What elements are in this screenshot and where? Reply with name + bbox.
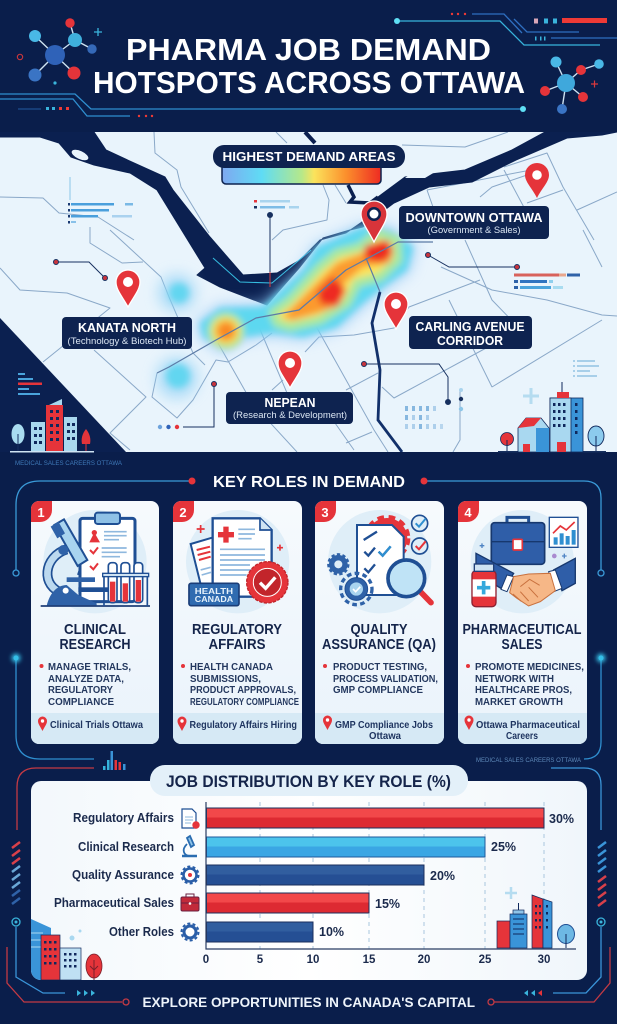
card bullets: GMP COMPLIANCE	[333, 684, 423, 696]
axes	[206, 802, 576, 949]
card bullets: PROCESS VALIDATION,	[333, 673, 438, 685]
card bullets: REGULATORY COMPLIANCE	[190, 696, 299, 708]
label: Kanata North	[62, 317, 192, 349]
axis tick labels: 15	[363, 954, 376, 966]
card heading: RESEARCH	[60, 636, 130, 653]
icon: briefcase row	[181, 894, 199, 911]
icon: document row	[182, 809, 200, 829]
card bullets	[40, 661, 131, 708]
card heading: REGULATORY	[192, 621, 282, 638]
value labels: 30%	[549, 812, 574, 826]
card bullets	[181, 661, 299, 708]
label: Kanata North: (Technology & Biotech Hub)	[68, 336, 186, 347]
card heading: CLINICAL	[64, 621, 126, 638]
card bullets: HEALTH CANADA	[190, 661, 273, 673]
card link: Ottawa Pharmaceutical	[476, 719, 580, 731]
axis tick labels: 25	[479, 954, 492, 966]
title: PHARMA JOB DEMAND	[126, 32, 491, 67]
panel: card 2 regulatory affairs: 2	[179, 505, 187, 520]
card heading	[192, 621, 282, 653]
card bullets: ANALYZE DATA,	[48, 673, 124, 685]
label: Downtown Ottawa: DOWNTOWN OTTAWA	[406, 211, 542, 225]
section frame: key roles	[12, 478, 606, 759]
card bullets: PRODUCT APPROVALS,	[190, 684, 296, 696]
card bullets	[323, 661, 438, 696]
axis tick labels: 20	[418, 954, 430, 966]
label: Kanata North: KANATA NORTH	[78, 320, 176, 335]
chart title: JOB DISTRIBUTION BY KEY ROLE (%)	[166, 772, 451, 791]
panel: job distribution chart	[31, 765, 587, 980]
axis tick labels	[203, 954, 550, 966]
card heading: AFFAIRS	[208, 636, 266, 653]
main road over heat	[157, 242, 433, 373]
axis tick labels: 0	[203, 954, 209, 966]
dark highway	[372, 292, 402, 452]
callout lines and mini legends	[54, 212, 520, 427]
value labels: 25%	[491, 840, 516, 854]
icon: briefcase handshake medicine	[471, 510, 578, 613]
axis tick labels: 10	[307, 954, 319, 966]
pin: northeast	[525, 163, 549, 198]
card bullets: REGULATORY	[48, 684, 113, 696]
footer call to action: EXPLORE OPPORTUNITIES IN CANADA'S CAPITAL	[142, 994, 475, 1010]
category labels: Quality Assurance	[72, 868, 174, 882]
card heading: SALES	[502, 636, 542, 653]
icon: microscope row	[182, 836, 197, 856]
label: Carling Avenue Corridor: CORRIDOR	[437, 333, 504, 348]
icon: microscope clipboard and test tubes	[41, 510, 150, 613]
label: Downtown Ottawa: (Government & Sales)	[428, 225, 520, 236]
card bullets	[466, 661, 584, 708]
icon: small bar motif	[103, 751, 126, 770]
card bullets: SUBMISSIONS,	[190, 673, 261, 685]
icon: gear row 2	[182, 924, 198, 940]
card bullets: COMPLIANCE	[48, 696, 114, 708]
legend: highest demand areas: HIGHEST DEMAND AREAS	[222, 149, 396, 164]
card link: Careers	[506, 730, 538, 742]
card link	[178, 716, 297, 731]
panel: card 4 pharmaceutical sales	[458, 501, 587, 744]
value labels	[319, 812, 574, 939]
bottom-right corner city	[498, 382, 606, 452]
label: Carling Avenue Corridor	[409, 316, 532, 349]
card link: Clinical Trials Ottawa	[50, 719, 143, 731]
axis tick labels: 5	[257, 954, 264, 966]
icon: checklist gears magnifier	[328, 510, 431, 613]
corner triangle	[0, 318, 126, 452]
icon: regulatory documents and seal: HEALTH	[195, 586, 233, 596]
icon: molecule left	[17, 18, 102, 85]
pin: Kanata North	[116, 270, 140, 307]
axis tick labels: 30	[538, 954, 550, 966]
card link: Ottawa	[369, 730, 401, 742]
bottom-left corner city	[10, 373, 94, 452]
icon: regulatory documents and seal	[186, 510, 289, 613]
label: Nepean: (Research & Development)	[233, 410, 347, 421]
pin: Downtown	[361, 201, 387, 242]
category labels	[54, 811, 174, 939]
icon: gear row	[182, 866, 198, 884]
pin: Carling	[384, 292, 408, 329]
gridlines	[260, 802, 544, 949]
legend: highest demand areas	[213, 145, 405, 184]
card heading: ASSURANCE (QA)	[322, 636, 436, 653]
card heading	[322, 621, 436, 653]
chart right skyline	[497, 887, 574, 948]
chart frame decoration	[7, 768, 610, 1005]
panel: card 2 regulatory affairs	[173, 501, 302, 744]
chart left skyline	[31, 919, 102, 980]
card heading	[462, 621, 582, 653]
panel: card 4 pharmaceutical sales: 4	[464, 505, 472, 520]
panel: heat map of Ottawa	[0, 132, 617, 452]
value labels: 20%	[430, 869, 455, 883]
value labels: 10%	[319, 925, 344, 939]
card bullets: NETWORK WITH	[475, 673, 554, 685]
label: Downtown Ottawa	[399, 206, 549, 239]
icon: regulatory documents and seal: CANADA	[195, 594, 234, 604]
card link: Regulatory Affairs Hiring	[190, 719, 297, 731]
watermark right: MEDICAL SALES CAREERS OTTAWA	[476, 757, 582, 764]
card heading: PHARMACEUTICAL	[462, 621, 582, 638]
category labels: Pharmaceutical Sales	[54, 896, 174, 910]
panel: card 1 clinical research: 1	[37, 505, 45, 520]
river islands and tributaries	[70, 132, 435, 283]
card link	[323, 716, 433, 742]
panel: card 3 quality assurance: 3	[321, 505, 329, 520]
heat layers	[156, 227, 413, 399]
card bullets: PRODUCT TESTING,	[333, 661, 427, 673]
panel: card 1 clinical research	[31, 501, 159, 744]
heading: key roles in demand: KEY ROLES IN DEMAND	[213, 474, 405, 491]
label: Carling Avenue Corridor: CARLING AVENUE	[416, 319, 525, 334]
card bullets: MANAGE TRIALS,	[48, 661, 131, 673]
card link	[38, 716, 143, 731]
card heading	[60, 621, 130, 653]
header: circuit decoration	[0, 13, 617, 117]
bars	[206, 808, 544, 942]
category labels: Other Roles	[109, 925, 174, 939]
panel: card 3 quality assurance	[315, 501, 444, 744]
river	[0, 132, 617, 305]
chart title	[150, 765, 468, 796]
title	[93, 32, 525, 100]
category labels: Clinical Research	[78, 840, 174, 854]
map roads	[0, 132, 617, 452]
card bullets: MARKET GROWTH	[475, 696, 563, 708]
card bullets: HEALTHCARE PROS,	[475, 684, 572, 696]
value labels: 15%	[375, 897, 400, 911]
card link: GMP Compliance Jobs	[335, 719, 433, 731]
card bullets: PROMOTE MEDICINES,	[475, 661, 584, 673]
category labels: Regulatory Affairs	[73, 811, 174, 825]
card heading: QUALITY	[350, 621, 408, 638]
icon: molecule right	[540, 56, 604, 114]
label: Nepean	[226, 392, 353, 424]
label: Nepean: NEPEAN	[264, 395, 316, 410]
pin: Nepean	[278, 351, 302, 388]
card link	[464, 716, 580, 742]
title: HOTSPOTS ACROSS OTTAWA	[93, 65, 525, 100]
watermark: MEDICAL SALES CAREERS OTTAWA	[15, 460, 123, 467]
